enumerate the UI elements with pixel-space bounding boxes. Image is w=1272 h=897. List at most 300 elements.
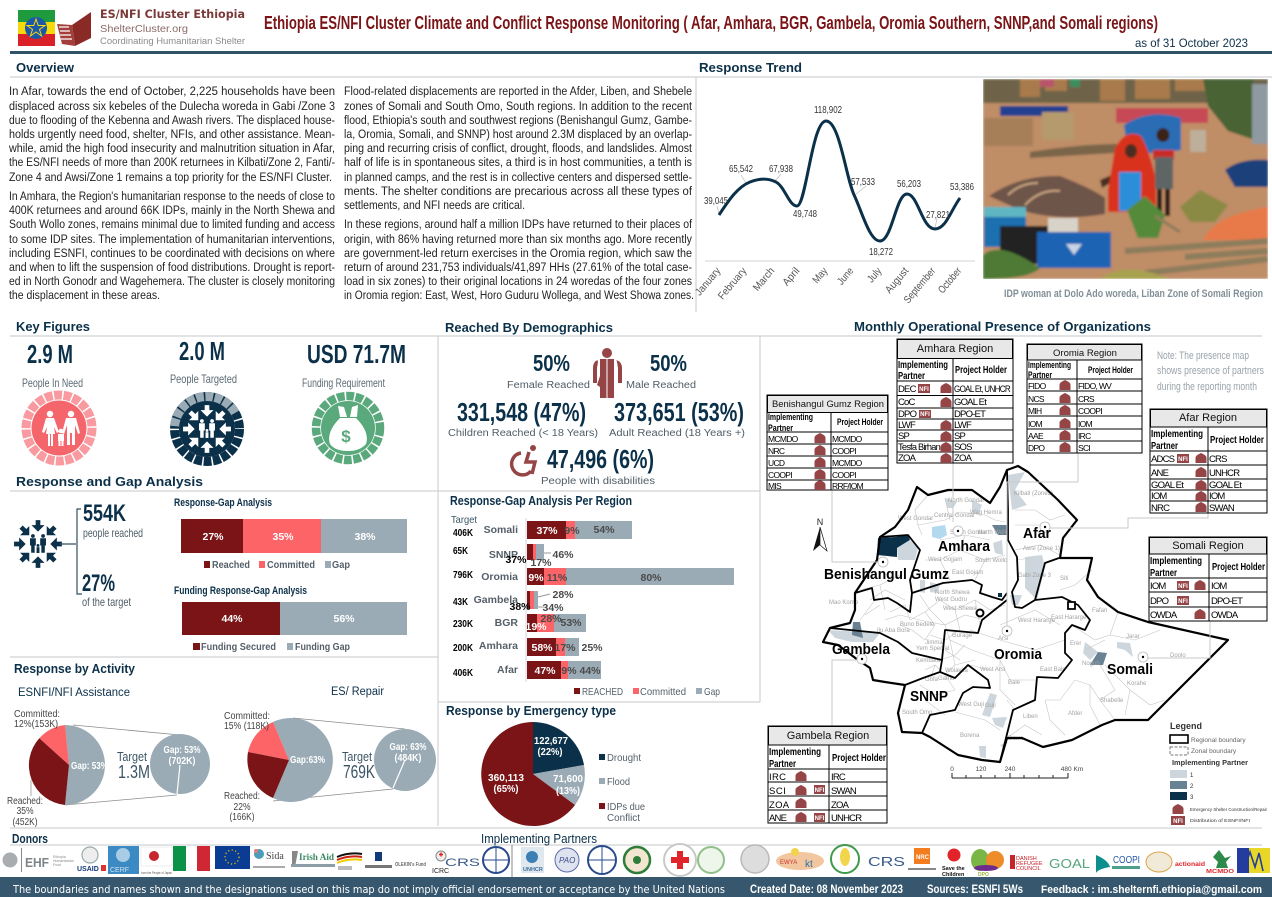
- partner logos: kt: [805, 859, 813, 870]
- table: Oromia: IRC: [1078, 431, 1091, 441]
- bar: Amhara: 58%: [531, 642, 553, 654]
- table: Oromia: SCI: [1078, 443, 1090, 453]
- pie chart: ESNFI/NFI assistance: Gap: 53%: [164, 745, 201, 756]
- line chart: response trend: 118,902: [814, 104, 842, 116]
- bar: Afar: 47%: [534, 665, 556, 677]
- donor logos: Irish Aid: [299, 852, 334, 862]
- text block: overview column 1: In Afar, towards the end of October, 2,225 households have been: [9, 84, 335, 98]
- table: Amhara: SOS: [954, 442, 972, 453]
- map legend: NFI: [1173, 819, 1183, 825]
- table: Afar: SWAN: [1209, 503, 1235, 514]
- panel: response by emergency type: [446, 703, 645, 826]
- figure: people targeted: 2.0 M: [179, 336, 225, 366]
- table: Somali: DPO: [1150, 596, 1169, 607]
- bar chart: per region: Amhara: [479, 640, 518, 652]
- heading: overview: Overview: [16, 60, 75, 75]
- line chart: response trend: May: [810, 265, 831, 286]
- stat: female reached: [507, 350, 590, 391]
- table: Oromia: Oromia Region: [1053, 348, 1117, 359]
- small zone labels: Bale: [1008, 680, 1021, 686]
- region labels: Gambela: [832, 641, 891, 658]
- stat: people reached: 554K: [83, 500, 127, 527]
- map legend: Emergency Shelter Construction/Repair: [1190, 807, 1267, 812]
- table: Benishangul Gumz: RRF/IOM: [832, 481, 864, 491]
- text block: overview column 2: are government-led return exercises in the Oromia region, which saw the: [344, 246, 692, 260]
- figure: funding requirement: USD 71.7M: [307, 339, 406, 369]
- table: Oromia: IOM: [1028, 419, 1043, 429]
- figure: people in need: People In Need: [22, 376, 83, 390]
- line chart: response trend: September: [901, 265, 939, 306]
- small zone labels: Liben: [1023, 714, 1038, 720]
- small zone labels: East Gojam: [952, 570, 983, 576]
- small zone labels: Erer: [1070, 641, 1081, 647]
- table: Afar: UNHCR: [1209, 468, 1240, 479]
- regional boundaries: [823, 466, 1228, 762]
- small zone labels: Nogob: [1082, 661, 1100, 667]
- small zone labels: Siti: [1060, 576, 1068, 582]
- table: Oromia: COOPI: [1078, 406, 1102, 416]
- table: Afar: GOAL Et: [1209, 480, 1242, 491]
- bar: Gambela: 28%: [552, 589, 574, 601]
- heading: presence: Monthly Operational Presence of Organizations: [854, 319, 1151, 334]
- table: Benishangul Gumz: COOPI: [832, 446, 856, 456]
- donor logos: Sida: [266, 851, 284, 862]
- table: Gambela: Partner: [769, 759, 796, 770]
- line chart: response trend: February: [716, 265, 750, 302]
- partner logos: MCMDO: [1206, 869, 1234, 875]
- table: Oromia: FIDO, WV: [1078, 381, 1112, 391]
- disclaimer: The boundaries and names shown and the designations used on this map do not imply official endorsement or acceptance by the United Nations: [12, 883, 725, 896]
- text block: overview column 2: Flood-related displacements are reported in the Afder, Liben, and Shebele: [344, 84, 692, 98]
- small zone labels: Wolayita: [945, 668, 969, 674]
- figure: people targeted: People Targeted: [170, 372, 237, 386]
- panel: donors: [2, 831, 480, 875]
- map: Ethiopia regions: [823, 466, 1228, 762]
- bar chart: per region: 230K: [453, 618, 473, 630]
- pie chart: emergency type: (65%): [494, 783, 518, 795]
- bar: BGR: [525, 613, 586, 633]
- partner logos: GOAL: [1049, 856, 1090, 871]
- table: Gambela: IRC: [831, 772, 846, 783]
- table: Afar: NRC: [1151, 503, 1170, 514]
- table: Somali: Partner: [1150, 568, 1177, 579]
- scale bar: [950, 766, 1083, 778]
- pie chart: ES repair: 22%: [234, 802, 251, 813]
- line chart: response trend: June: [835, 265, 856, 287]
- partner logos: PAO: [559, 856, 575, 865]
- figure: people targeted: [170, 336, 242, 464]
- heading: donors: Donors: [12, 831, 48, 846]
- icon: Ethiopian flag: [18, 10, 55, 46]
- line chart: response trend: 57,533: [851, 176, 875, 188]
- line chart: response trend: 53,386: [950, 181, 974, 193]
- text block: overview column 1: including ESNFI, continues to be coordinated with decisions on where: [9, 246, 335, 260]
- heading: per region: Response-Gap Analysis Per Region: [450, 493, 632, 508]
- stat: male reached: [626, 350, 696, 391]
- table: Gambela: NFI: [815, 816, 825, 822]
- small zone labels: Borena: [960, 733, 980, 739]
- pie chart: ES repair: Target: [342, 749, 372, 764]
- feedback: Feedback : im.shelternfi.ethiopia@gmail.com: [1041, 884, 1262, 896]
- bar chart: response gap: 38%: [354, 531, 376, 543]
- panel: reached by demographics: [445, 320, 745, 487]
- text block: overview column 2: settlements, and NFI needs are critical.: [344, 198, 525, 212]
- table: Afar: IOM: [1151, 491, 1167, 502]
- small zone labels: West Guji: [958, 702, 984, 708]
- partner logos: DPO: [978, 872, 989, 878]
- bar chart: funding gap: 56%: [333, 613, 355, 625]
- legend: Gap: [704, 686, 720, 698]
- table: Somali: Implementing: [1150, 556, 1202, 567]
- line chart: response trend: [693, 104, 975, 306]
- logo text: ES/NFI Cluster Ethiopia: [100, 7, 245, 21]
- partner logos: NRC: [916, 855, 930, 861]
- bar chart: response gap: Response-Gap Analysis: [174, 497, 272, 509]
- map capital markers: [857, 522, 1148, 664]
- stat: female reached: 50%: [533, 350, 570, 376]
- region labels: Benishangul Gumz: [824, 566, 949, 583]
- bar chart: per region: Afar: [497, 664, 518, 676]
- table: Amhara: Project Holder: [955, 365, 1007, 376]
- heading: key figures: Key Figures: [16, 319, 90, 334]
- donor logos: OLEKIN's Fund: [395, 862, 426, 868]
- small zone labels: West Shewa: [943, 606, 977, 612]
- table: Oromia: IOM: [1078, 419, 1093, 429]
- bar chart: funding gap: Funding Secured: [201, 641, 276, 653]
- panel: response trend: [693, 60, 1268, 306]
- stat: people reached: [83, 500, 143, 540]
- small zone labels: Arsi: [998, 636, 1008, 642]
- table: Amhara: ZOA: [954, 453, 973, 464]
- table: Oromia: DPO: [1028, 443, 1045, 453]
- bar chart: funding gap: 44%: [221, 613, 243, 625]
- small zone labels: Guji: [985, 703, 996, 709]
- table: Gambela: Gambela Region: [787, 730, 869, 742]
- table: Oromia: NCS: [1028, 394, 1045, 404]
- line chart: response trend: April: [780, 265, 802, 288]
- bar: SNNP: 37%: [505, 554, 527, 566]
- bar chart: response gap: Committed: [267, 559, 315, 571]
- bar chart: per region: 200K: [453, 642, 473, 654]
- table: Amhara: [897, 339, 1013, 464]
- bar chart: per region: Oromia: [481, 571, 518, 583]
- donor logos: Ethiopia: [53, 855, 66, 859]
- table: Amhara: LWF: [898, 420, 916, 431]
- small zone labels: [829, 491, 1186, 742]
- table: Somali: OWDA: [1211, 610, 1239, 621]
- pie chart: ES repair: ES/ Repair: [331, 686, 384, 698]
- table: Benishangul Gumz: MIS: [768, 481, 782, 491]
- table: Amhara: Partner: [898, 371, 925, 382]
- bar: Gambela: 38%: [509, 601, 531, 613]
- donor logos: [2, 846, 480, 875]
- partner logos: DANISH: [1016, 856, 1037, 862]
- bar: Somali: 54%: [593, 524, 615, 536]
- partner logos: Save the: [942, 866, 965, 872]
- legend: REACHED: [582, 686, 623, 698]
- bar: Oromia: 80%: [640, 572, 662, 584]
- donor logos: CERF: [110, 867, 129, 874]
- bar: Oromia: 9%: [528, 572, 544, 584]
- line chart: response trend: July: [865, 265, 885, 285]
- line chart: response trend: 67,938: [769, 163, 793, 175]
- connector bracket: [60, 509, 82, 594]
- pie chart: emergency type: [481, 722, 585, 826]
- partner logos: EWYA: [780, 860, 797, 866]
- panel: response and gap analysis: [10, 474, 438, 653]
- table: Benishangul Gumz: Benishangul Gumz Region: [772, 399, 884, 410]
- table: Amhara: Implementing: [898, 360, 948, 371]
- stat: children reached: [448, 397, 598, 439]
- small zone labels: Fafan: [1092, 608, 1107, 614]
- text block: overview column 1: Zone 4 and Awsi/Zone 1 remains a top priority for the ES/NFI Cluster.: [9, 170, 332, 184]
- text block: overview column 2: in Oromia region: East, West, Horo Guduru Wollega, and West Showa zones.: [344, 288, 694, 302]
- sources: Sources: ESNFI 5Ws: [927, 882, 1023, 896]
- partner logos: COUNCIL: [1016, 866, 1041, 872]
- partner logos: actionaid: [1175, 862, 1205, 868]
- small zone labels: West Gondar: [898, 516, 933, 522]
- map legend: 1: [1190, 773, 1194, 779]
- bar chart: response gap: 35%: [272, 531, 294, 543]
- small zone labels: North Gondar: [948, 498, 984, 504]
- bar chart: per region: 65K: [453, 545, 468, 557]
- bar: Oromia: 11%: [547, 572, 568, 584]
- pie chart: ES repair: Gap: 63%: [390, 742, 427, 753]
- bar chart: per region: BGR: [495, 617, 518, 629]
- date note: as of 31 October 2023: [1135, 36, 1248, 50]
- bar chart: per region: SNNP: [489, 549, 518, 561]
- region labels: SNNP: [910, 688, 948, 705]
- table: Amhara: ZOA: [898, 453, 917, 464]
- pie chart: ESNFI/NFI assistance: Committed:: [14, 709, 60, 720]
- icon: person: [593, 348, 622, 398]
- donor logos: CRS: [445, 857, 480, 869]
- map legend: Distribution of ESNFI/NFI: [1190, 818, 1250, 823]
- pie chart: emergency type: (13%): [556, 785, 580, 797]
- small zone labels: Gurage: [952, 633, 973, 639]
- table: Amhara: DPO-ET: [954, 409, 986, 420]
- table: Gambela: [768, 726, 887, 824]
- table: Amhara: DEC: [898, 384, 917, 395]
- text block: overview column 2: flood, Ethiopia's south and southwest regions (Benishangul Gumz, Gambe-: [344, 113, 692, 127]
- table: Gambela: Implementing: [769, 747, 821, 758]
- partner logos: COOPI: [1113, 855, 1140, 866]
- table: Benishangul Gumz: Project Holder: [837, 417, 883, 427]
- line chart: response trend: 39,045: [704, 195, 728, 207]
- text block: overview column 1: due to flooding of the Kebenna and Awash rivers. The displaced house-: [9, 113, 335, 127]
- stat: people with disabilities: People with disabilities: [541, 476, 655, 487]
- table: Afar: Partner: [1151, 441, 1178, 452]
- text block: overview column 1: while, amid the high food insecurity and malnutrition situation in Afar,: [8, 141, 335, 155]
- pie chart: ESNFI/NFI assistance: (702K): [168, 756, 196, 767]
- leader lines: [832, 453, 1210, 726]
- pie chart: ES repair: Gap:63%: [290, 755, 325, 766]
- pie chart: ESNFI/NFI assistance: 12%(153K): [14, 719, 58, 730]
- partner logos: REFUGEE: [1016, 861, 1043, 867]
- bar: SNNP: 17%: [530, 557, 552, 569]
- small zone labels: South Omo: [902, 710, 933, 716]
- table: Amhara: CoC: [898, 397, 916, 408]
- bar chart: funding gap: Funding Gap: [295, 641, 350, 653]
- pie chart: ESNFI/NFI assistance: Target: [117, 749, 147, 764]
- stat: adult reached: 373,651 (53%): [614, 397, 744, 427]
- table: Oromia: [1027, 344, 1142, 453]
- text block: overview column 2: la, Oromia, Somali, and SNNP) host around 2.3M displaced by an overlap-: [344, 127, 692, 141]
- small zone labels: Jimma: [925, 640, 943, 646]
- bar: BGR: 28%: [540, 613, 562, 625]
- stat: male reached: 50%: [650, 350, 687, 376]
- small zone labels: Shabelle: [1100, 698, 1124, 704]
- created date: Created Date: 08 November 2023: [750, 882, 903, 896]
- table: Afar: Afar Region: [1179, 412, 1237, 424]
- small zone labels: West Gojjam: [928, 557, 962, 563]
- text block: overview column 1: In Amhara, the Region's humanitarian response to the needs of close to: [9, 189, 335, 203]
- small zone labels: Gofa: [925, 677, 939, 683]
- legend: emergency type: IDPs due: [607, 802, 645, 813]
- text block: overview column 2: ments. The shelter conditions are precarious across all these types of: [344, 184, 693, 198]
- heading: response and gap: Response and Gap Analysis: [16, 474, 203, 489]
- legend: emergency type: [599, 753, 645, 824]
- table: Amhara: Tesfa Birhan: [898, 442, 940, 453]
- pie chart: ES repair: (166K): [230, 812, 254, 823]
- panel: monthly operational presence map: [767, 319, 1267, 825]
- stat: adult reached: [609, 397, 745, 439]
- bar chart: per region: 406K: [453, 667, 473, 679]
- legend: emergency type: Conflict: [607, 813, 640, 824]
- region labels: Afar: [1023, 525, 1051, 542]
- small zone labels: West Arsi: [980, 667, 1005, 673]
- line chart: response trend: January: [693, 265, 724, 298]
- legend: Committed: [640, 686, 686, 698]
- donor logos: Humanitarian: [53, 859, 74, 863]
- text block: overview column 1: ed in North Gonodr and Wagehemera. The cluster is closely monitoring: [9, 274, 335, 288]
- icon: shelter cluster book: [57, 12, 91, 46]
- stat: of the target: [82, 570, 132, 609]
- table: Afar: IOM: [1209, 491, 1225, 502]
- stat: people with disabilities: 47,496 (6%): [547, 444, 654, 474]
- table: Benishangul Gumz: [767, 395, 888, 491]
- table: Benishangul Gumz: MCMDO: [768, 434, 799, 444]
- map legend: Legend: [1170, 721, 1202, 731]
- heading: response by activity: Response by Activity: [14, 661, 136, 676]
- table: Afar: Implementing: [1151, 429, 1203, 440]
- small zone labels: Doolo: [1170, 653, 1186, 659]
- map shading: partner counts: [828, 472, 1133, 758]
- pie chart: ESNFI/NFI assistance: Gap: 53%: [71, 761, 108, 772]
- pie chart: ES repair: [224, 686, 436, 823]
- text block: overview column 1: displaced across six kebeles of the Dulecha woreda in Gabi /Zone 3: [9, 99, 335, 113]
- table: Gambela: ZOA: [769, 800, 790, 811]
- panel: key figures: [16, 319, 406, 464]
- stat: children reached: Children Reached (< 18 Years): [448, 428, 598, 439]
- icon: north arrow: N: [817, 517, 823, 527]
- table: Somali: IOM: [1150, 581, 1166, 592]
- bar: Oromia: [527, 568, 734, 585]
- figure: funding requirement: Funding Requirement: [302, 376, 385, 390]
- bar: Afar: [527, 661, 601, 679]
- table: Afar: [1150, 409, 1267, 514]
- map legend: 3: [1190, 795, 1194, 801]
- scale bar: 480 Km: [1061, 766, 1083, 773]
- table: Somali: IOM: [1211, 581, 1227, 592]
- small zone labels: Korahe: [1127, 681, 1147, 687]
- bar chart: per region: [451, 514, 734, 698]
- region labels: Somali: [1107, 661, 1153, 678]
- pie chart: ESNFI/NFI assistance: [7, 687, 210, 828]
- text block: overview column 2: origin, with 86% having returned more than six months ago. More recently: [344, 232, 693, 246]
- region labels: Amhara: [938, 538, 991, 555]
- note: [1157, 350, 1264, 393]
- pie chart: ES repair: Reached:: [224, 791, 260, 802]
- donor logos: Fund: [53, 863, 61, 867]
- bar chart: per region: Somali: [484, 524, 518, 536]
- header logos: [18, 7, 245, 46]
- partner logos: Children: [942, 872, 965, 878]
- pie chart: emergency type: (22%): [538, 746, 562, 758]
- bar chart: response gap: Reached: [212, 559, 250, 571]
- table: Amhara: GOAL Et: [954, 397, 987, 408]
- text block: overview column 1: [8, 84, 335, 302]
- table: Amhara: GOAL Et, UNHCR: [954, 384, 1011, 395]
- stat: of the target: of the target: [82, 595, 132, 609]
- logo text: [100, 7, 245, 46]
- table: Benishangul Gumz: MCMDO: [832, 458, 863, 468]
- bar: BGR: 53%: [560, 617, 582, 629]
- pie chart: ESNFI/NFI assistance: (452K): [12, 817, 38, 828]
- map legend: Implementing Partner: [1172, 758, 1248, 767]
- bar chart: per region: 406K: [453, 527, 473, 539]
- bar chart: per region: 796K: [453, 569, 473, 581]
- small zone labels: Awsi (Zone 1): [1023, 546, 1060, 552]
- table: Oromia: AAE: [1028, 431, 1044, 441]
- small zone labels: Gamo: [938, 676, 955, 682]
- line chart: response trend: 27,821: [926, 209, 950, 221]
- figure: people in need: [22, 339, 92, 461]
- table: Gambela: ZOA: [831, 800, 850, 811]
- stat: people with disabilities: [541, 444, 655, 487]
- pie chart: ESNFI/NFI assistance: 1.3M: [118, 762, 150, 782]
- table: Benishangul Gumz: Partner: [768, 423, 793, 433]
- small zone labels: South Wollo: [975, 558, 1008, 564]
- bar: SNNP: 46%: [552, 549, 574, 561]
- table: Gambela: SWAN: [831, 786, 857, 797]
- pie chart: ESNFI/NFI assistance: Reached:: [7, 796, 43, 807]
- heading: response trend: Response Trend: [699, 60, 802, 75]
- partner logos: CRS: [868, 854, 905, 869]
- bar: Somali: 9%: [564, 525, 580, 537]
- small zone labels: South Gondar: [950, 530, 987, 536]
- text block: overview column 2: in planned camps, and the rest is in collective centers and dispersed settle-: [344, 170, 692, 184]
- map legend: [1170, 721, 1267, 825]
- bar: Amhara: 17%: [554, 642, 576, 654]
- line chart: response trend: 65,542: [729, 163, 753, 175]
- table: Somali: DPO-ET: [1211, 596, 1243, 607]
- panel: response gap per region: [450, 493, 734, 698]
- pie chart: ES repair: (484K): [394, 753, 422, 764]
- text block: overview column 2: In these regions, around half a million IDPs have returned to their places of: [344, 217, 692, 231]
- line chart: response trend: October: [936, 265, 965, 296]
- bar: SNNP: [505, 544, 574, 569]
- pie chart: ESNFI/NFI assistance: 35%: [16, 806, 34, 817]
- table: Gambela: IRC: [769, 772, 786, 783]
- table: Gambela: Project Holder: [832, 753, 886, 764]
- photo: IDP woman (illustrated): [983, 79, 1268, 279]
- small zone labels: Ilu Aba Bora: [877, 628, 910, 634]
- table: Afar: ANE: [1151, 468, 1169, 479]
- table: Benishangul Gumz: NRC: [768, 446, 785, 456]
- partner logos: UNHCR: [523, 867, 543, 873]
- bar chart: response gap: [174, 497, 407, 571]
